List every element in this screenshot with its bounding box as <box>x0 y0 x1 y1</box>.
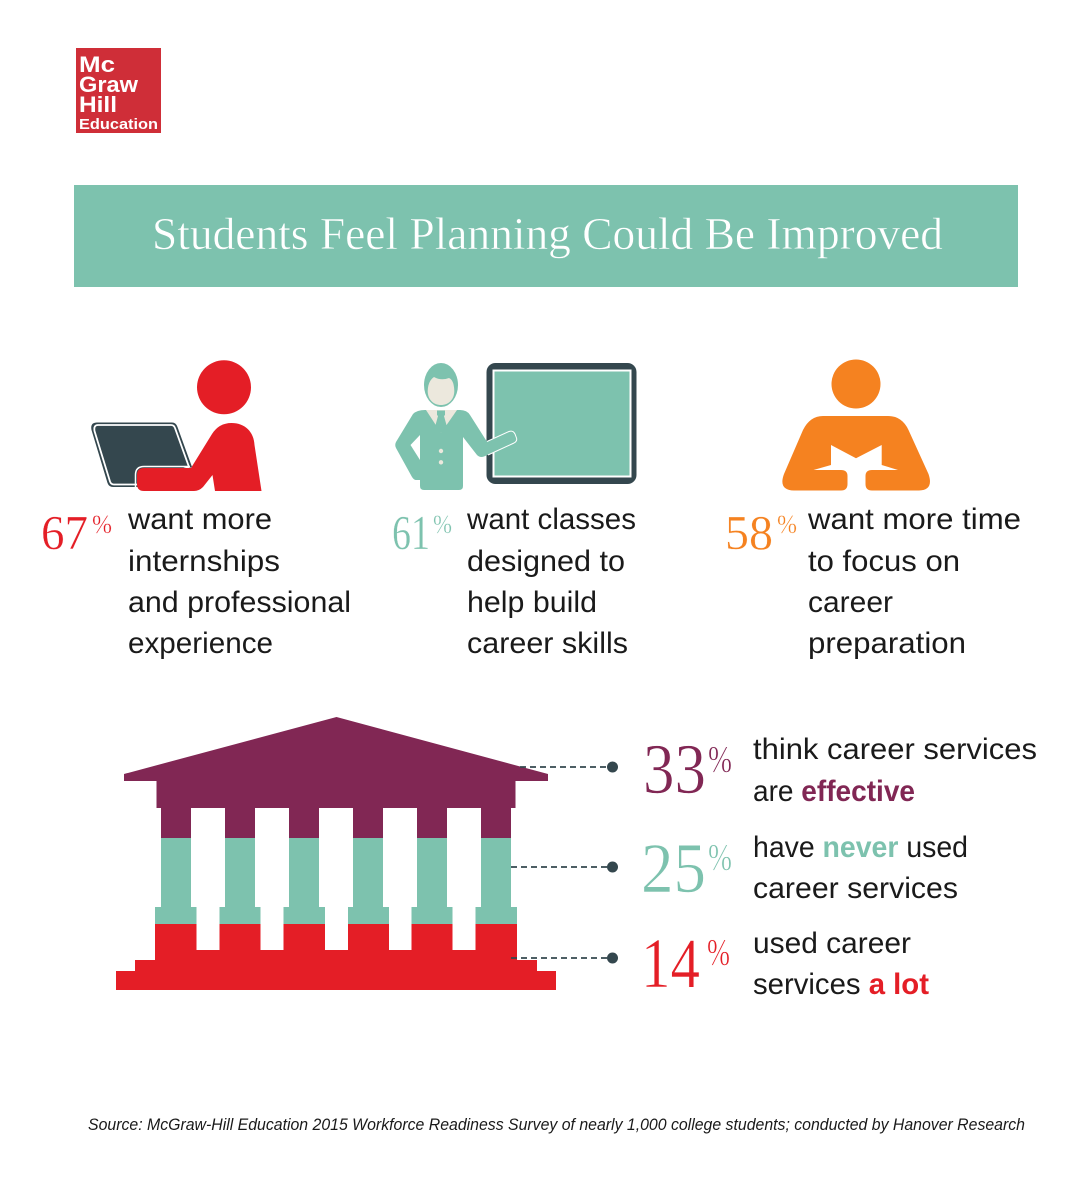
title banner <box>74 185 1018 287</box>
panel: time <box>725 360 1021 660</box>
text: want more internships: and professional <box>128 586 351 619</box>
connector: columns <box>511 862 618 872</box>
text: want classes: want classes <box>466 503 636 536</box>
logo: McGraw Hill Education: Education <box>79 116 158 133</box>
stat: 25% never used: have never used <box>753 831 968 864</box>
stat: 25% never used: career services <box>753 872 958 905</box>
text: want more internships: internships <box>128 545 280 578</box>
stat: 67%: 67 <box>41 505 88 560</box>
source note: Source: McGraw-Hill Education 2015 Workforce Readiness Survey of nearly 1,000 college students; conducted by Hanover Research <box>88 1115 1025 1134</box>
stat: 61%: 61 <box>392 505 430 560</box>
stat: 58%: % <box>777 510 797 539</box>
logo: McGraw Hill Education <box>76 48 161 133</box>
stat: 25% never used: % <box>708 837 732 879</box>
text: want more time <box>807 503 1021 660</box>
text: want more time: want more time <box>807 503 1021 536</box>
stat: 33% effective: are effective <box>753 775 915 808</box>
icon: teacher at board <box>395 363 636 490</box>
stat: 14% a lot: 14 <box>641 925 700 1003</box>
text: want more time: preparation <box>808 627 966 660</box>
stat: 33% effective: % <box>708 739 732 781</box>
logo: McGraw Hill Education: Hill <box>79 92 117 117</box>
text: want more internships <box>127 503 351 660</box>
text: want classes: designed to <box>467 545 625 578</box>
stat: 58% <box>725 505 797 560</box>
stat: 14% a lot: used career <box>753 927 911 960</box>
stat: 14% a lot: % <box>707 932 730 974</box>
panel: classes <box>392 363 636 660</box>
icon: person reading <box>782 360 930 490</box>
title banner: Students Feel Planning Could Be Improved <box>152 209 943 259</box>
chart: columned building <box>116 717 556 990</box>
connector: roof <box>520 762 618 772</box>
text: want classes: career skills <box>467 627 628 660</box>
stat: 14% a lot <box>641 925 929 1003</box>
stat: 33% effective <box>643 731 1037 809</box>
stat: 25% never used: 25 <box>641 830 706 908</box>
stat: 14% a lot: services a lot <box>753 968 929 1001</box>
text: want classes <box>466 503 636 660</box>
stat: 25% never used <box>641 830 968 908</box>
stat: 67% <box>41 505 112 560</box>
stat: 33% effective: think career services <box>753 733 1037 766</box>
text: want more time: career <box>808 586 893 619</box>
text: want more internships: experience <box>128 627 273 660</box>
text: want classes: help build <box>467 586 597 619</box>
text: want more time: to focus on <box>808 545 960 578</box>
text: want more internships: want more <box>127 503 272 536</box>
connector: base <box>511 952 618 964</box>
icon: student at laptop <box>91 360 262 491</box>
stat: 61%: % <box>433 510 452 539</box>
stat: 58%: 58 <box>725 505 773 560</box>
stat: 33% effective: 33 <box>643 731 706 809</box>
stat: 67%: % <box>92 510 112 539</box>
logo: McGraw Hill Education: Graw <box>79 72 139 97</box>
logo: McGraw Hill Education: Mc <box>79 52 115 77</box>
panel: internships <box>41 360 351 660</box>
